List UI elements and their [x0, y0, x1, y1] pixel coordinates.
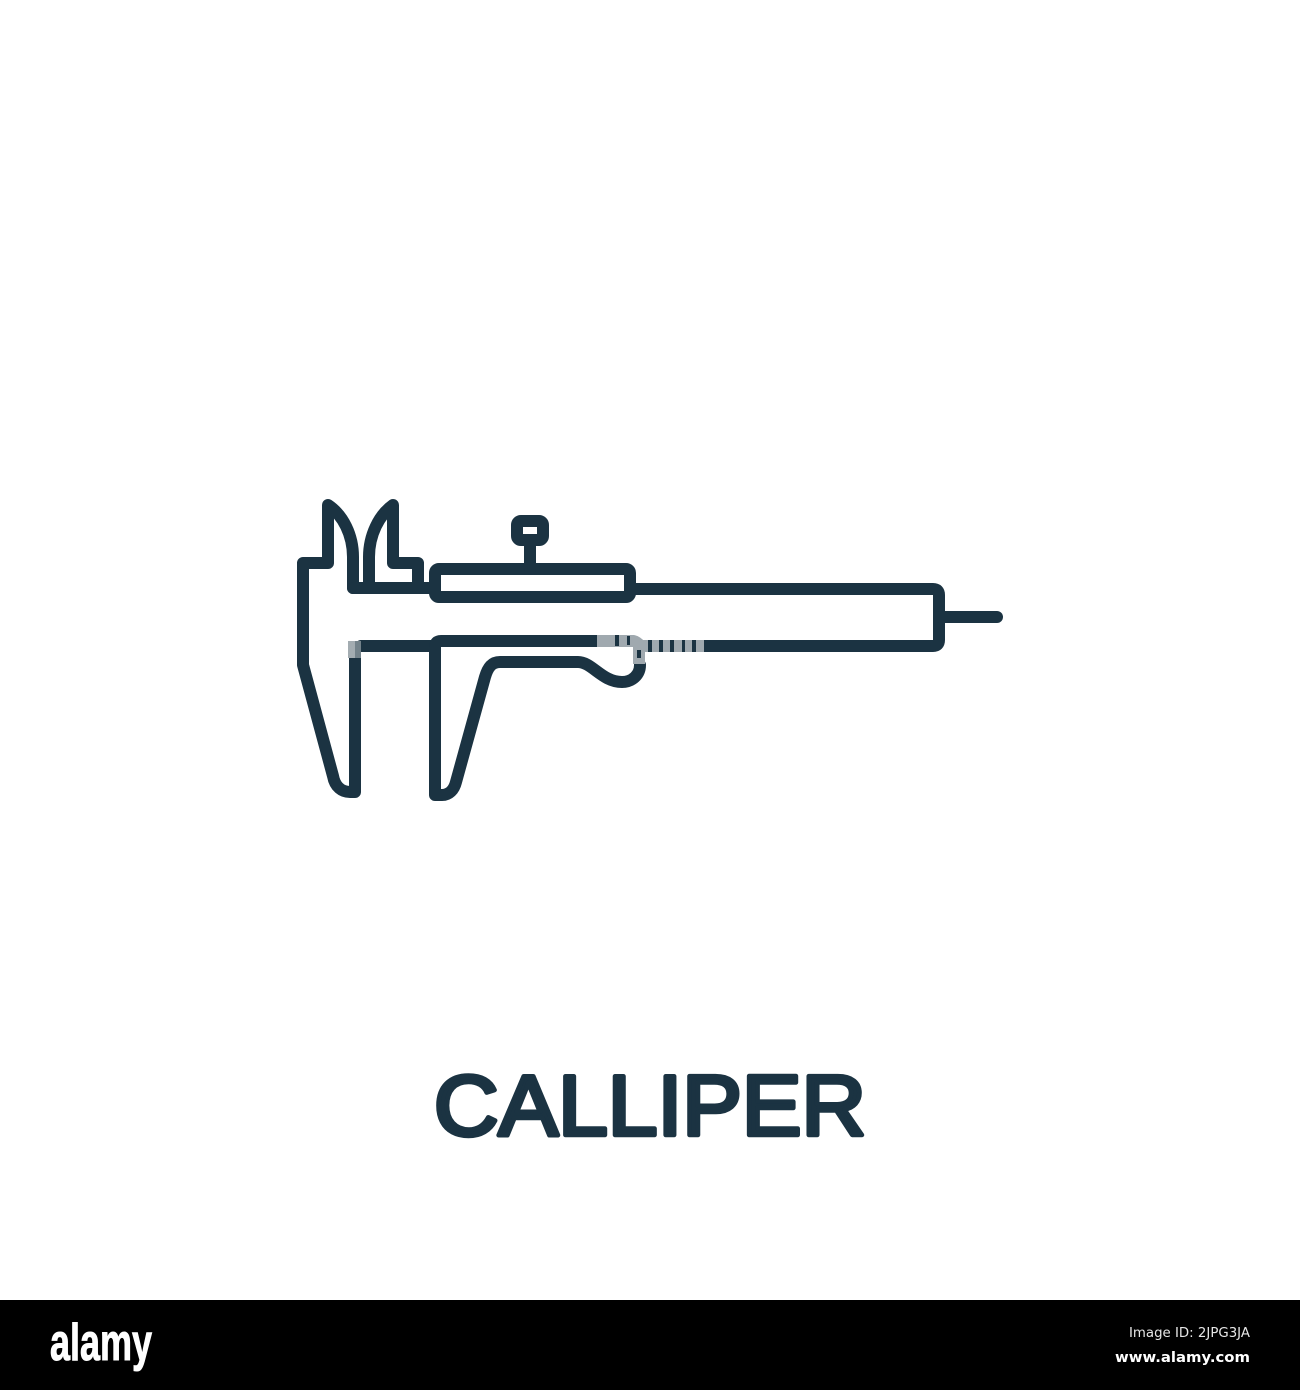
- beam lower edge left: [361, 640, 435, 652]
- main beam: [630, 589, 939, 646]
- footer bar: [0, 1300, 1300, 1390]
- image id: Image ID: 2JPG3JA: [1129, 1326, 1250, 1341]
- sliding jaw: [435, 641, 640, 795]
- title: CALLIPER: [434, 1059, 866, 1154]
- watermark overlay on calliper: [348, 635, 704, 664]
- main beam upper edge left: [353, 582, 435, 594]
- upper right prong: [369, 505, 418, 588]
- website: www.alamy.com: [1115, 1350, 1250, 1366]
- icon: calliper: [303, 505, 997, 795]
- depth rod: [939, 611, 997, 623]
- footer logo: alamy: [50, 1314, 152, 1372]
- fixed jaw and upper left prong: [303, 505, 355, 792]
- locking screw: [517, 521, 543, 569]
- slider body: [435, 569, 630, 597]
